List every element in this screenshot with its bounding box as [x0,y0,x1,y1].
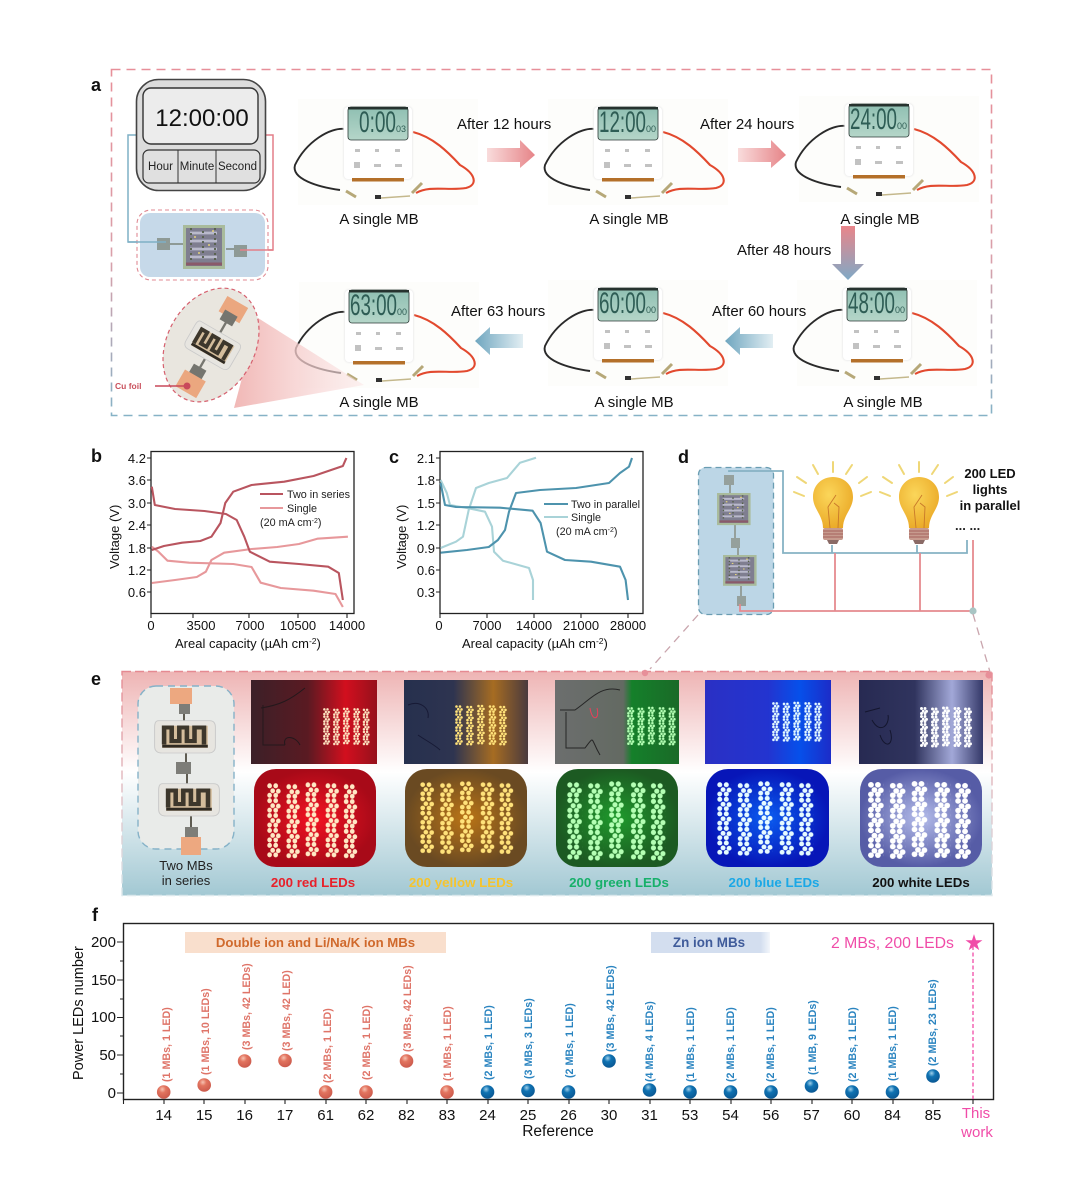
single micro-battery photo with wires [128,210,273,280]
y-axis numbers: 1.2 [128,563,146,578]
legend: ) [614,526,617,538]
x-axis reference numbers: 60 [844,1107,860,1124]
rotated labels: Zn ion group: (4 MBs, 4 LEDs) [644,1001,656,1082]
rotated labels: Zn ion group: (3 MBs, 3 LEDs) [523,998,535,1079]
caption: two MBs in series: Two MBs [159,858,213,873]
y-axis numbers: 3.6 [128,473,146,488]
time step labels: After 24 hours [700,116,794,133]
rotated labels: Zn ion group: (2 MBs, 1 LED) [847,1007,859,1082]
note: 200 LED lights in parallel [960,466,1020,513]
x-axis numbers: 14000 [329,618,365,633]
LED colour captions [271,875,970,890]
captions: A single MB: A single MB [843,394,923,411]
rotated labels: Zn ion group: (1 MBs, 1 LED) [685,1007,697,1082]
timer photo 48 hours [794,280,977,386]
legend [260,489,351,529]
x-axis title: Reference [522,1123,594,1140]
legend: (20 mA cm [260,517,312,529]
LED colour captions: 200 red LEDs [271,875,355,890]
x-axis reference numbers: 84 [884,1107,901,1124]
blue LED photos [705,680,831,867]
curve: two in series discharge and charge [152,458,346,600]
x-axis reference numbers: 56 [763,1107,779,1124]
y-axis numbers: 1.8 [128,541,146,556]
timer photo 63 hours: 63:00 [350,289,397,322]
this work line and star: ★ [964,930,984,955]
axis titles [107,505,321,651]
timer photo 24 hours [796,96,979,202]
rotated labels: Zn ion group: (1 MBs, 1 LED) [887,1006,899,1081]
x-axis numbers: 28000 [610,618,646,633]
x-axis numbers: 0 [435,618,443,633]
x-axis numbers: 0 [147,618,155,633]
legend: Two in series [287,489,351,501]
chart frame and ticks [117,924,994,1104]
legend [544,499,640,538]
panel label a: a [91,75,102,95]
curve: single discharge and charge [152,537,348,607]
axis titles [394,505,608,651]
panel label b: b [91,446,102,466]
note: 200 LED lights in parallel: in parallel [960,498,1020,513]
rotated labels: double ion group: (2 MBs, 1 LED) [361,1005,373,1080]
arrow: 63 hours left [475,327,523,355]
panel e: LED demonstration [91,669,993,896]
time step labels [451,116,831,320]
x-axis reference numbers: 15 [196,1107,213,1124]
rotated labels: double ion group [161,963,454,1083]
caption: two MBs in series: in series [162,873,211,888]
LED colour captions: 200 green LEDs [569,875,669,890]
x label: This work: This [962,1105,990,1122]
y-axis numbers: 1.8 [417,473,435,488]
rotated labels: Zn ion group: (2 MBs, 23 LEDs) [927,979,939,1066]
x-axis numbers: 10500 [280,618,316,633]
timer schematic: Hour [148,161,173,173]
zoom connector lines [650,614,990,672]
timer photo 12 hours: 12:00 [599,106,646,139]
y-axis numbers: 0.9 [417,541,435,556]
arrow: 24 hours [738,140,786,168]
rotated labels: double ion group: (1 MBs, 1 LED) [161,1007,173,1082]
x-axis reference numbers: 61 [317,1107,334,1124]
x-axis reference numbers: 82 [398,1107,415,1124]
legend: Single [571,512,601,524]
panel c: voltage chart parallel [389,447,646,651]
curve: single [441,458,536,600]
legend: ) [318,517,321,529]
x label: This work: work [960,1124,993,1141]
axis titles: Areal capacity (µAh cm [175,636,309,651]
rotated labels: Zn ion group: (1 MB, 9 LEDs) [807,1000,819,1075]
rotated labels: double ion group: (1 MBs, 10 LEDs) [200,988,212,1075]
timer schematic: Minute [180,161,214,173]
x-axis numbers [435,618,646,633]
panel a: long-duration timer demonstration [91,70,992,419]
timer photo 24 hours: 00 [897,121,907,131]
axis titles: Voltage (V) [107,505,122,569]
connection wires [729,471,973,611]
x-axis numbers: 7000 [473,618,501,633]
x-axis reference numbers: 26 [560,1107,577,1124]
rotated labels: Zn ion group: (2 MBs, 1 LED) [564,1003,576,1078]
axis titles: Voltage (V) [394,505,409,569]
legend: Two in parallel [571,499,640,511]
x-axis reference numbers: 14 [155,1107,172,1124]
y-axis numbers: 150 [91,972,116,989]
chart frame and ticks [436,452,643,618]
y-axis numbers: 0.3 [417,585,435,600]
x-axis reference numbers: 24 [479,1107,496,1124]
legend: Single [287,503,317,515]
photo: two MBs in series [138,686,234,855]
rotated labels: double ion group: (3 MBs, 42 LED) [281,970,293,1051]
data points: Zn ion [481,1054,940,1099]
note: 200 LED lights in parallel: lights [973,482,1007,497]
panel label f: f [92,905,99,925]
timer photo 12 hours [545,99,728,205]
x-axis numbers: 14000 [516,618,552,633]
captions: A single MB: A single MB [589,211,669,228]
y-axis numbers [128,451,146,600]
zoom cone from timer to cell [234,318,364,408]
band: double ion and Li/Na/K ion MBs: Double ion and Li/Na/K ion MBs [216,935,415,950]
x-axis reference numbers: 83 [439,1107,455,1124]
y-axis numbers: 200 [91,934,116,951]
x-axis numbers: 3500 [187,618,215,633]
zoomed cell with Cu foil: Cu foil [115,381,141,391]
x-axis reference numbers: 31 [641,1107,658,1124]
time step labels: After 48 hours [737,242,831,259]
axis titles: ) [604,636,608,651]
x-axis numbers: 21000 [563,618,599,633]
rotated labels: double ion group: (1 MBs, 1 LED) [442,1006,454,1081]
panel f: LED count comparison chart [71,905,994,1141]
rotated labels: Zn ion group: (2 MBs, 1 LED) [725,1007,737,1082]
timer photo 48 hours: 48:00 [848,287,895,320]
note: 200 LED lights in parallel: 200 LED [964,466,1016,481]
data points: double ion and Li/Na/K [157,1054,454,1099]
time step labels: After 12 hours [457,116,551,133]
x-axis reference numbers: 25 [520,1107,536,1124]
axis titles: ) [316,636,321,651]
x-axis numbers: 7000 [236,618,264,633]
bulb 2 [880,462,957,544]
y-axis numbers: 2.1 [417,451,435,466]
panel b: voltage chart series [91,446,365,651]
x-axis reference numbers: 16 [236,1107,253,1124]
LED colour captions: 200 yellow LEDs [409,875,513,890]
caption: two MBs in series [159,858,213,888]
rotated labels: double ion group: (2 MBs, 1 LED) [322,1008,334,1083]
timer photo 0 hours: 0:00 [359,106,396,139]
x label: This work [960,1105,993,1141]
rotated labels: Zn ion group: (3 MBs, 42 LEDs) [605,965,617,1052]
y-axis numbers: 2.4 [128,518,146,533]
time step labels: After 60 hours [712,303,806,320]
green LED photos [555,680,679,867]
timer photo 0 hours: 03 [396,124,406,134]
panel label d: d [678,447,689,467]
timer photo 60 hours: 60:00 [599,287,646,320]
LED colour captions: 200 blue LEDs [729,875,819,890]
chart frame and ticks [147,452,354,618]
timer schematic [128,80,273,250]
x-axis numbers [147,618,365,633]
y-axis numbers: 100 [91,1009,116,1026]
yellow LED photos [404,680,528,867]
rotated labels: Zn ion group: (2 MBs, 1 LED) [483,1005,495,1080]
zoomed cell with Cu foil [115,271,278,419]
legend: -2 [608,527,614,534]
timer photo 60 hours: 00 [646,305,656,315]
rotated labels: double ion group: (3 MBs, 42 LEDs) [241,963,253,1050]
band: Zn ion MBs: Zn ion MBs [673,935,745,950]
timer photo 63 hours: 00 [397,307,407,317]
panel label e: e [91,669,101,689]
timer photo 48 hours: 00 [895,305,905,315]
series MB photo [698,468,774,614]
captions: A single MB [339,211,923,411]
captions: A single MB: A single MB [339,394,419,411]
x-axis reference numbers: 30 [601,1107,617,1124]
rotated labels: Zn ion group: (2 MBs, 1 LED) [765,1007,777,1082]
timer photo 63 hours [296,282,479,388]
arrow: 60 hours left [725,327,773,355]
x-axis reference numbers: 53 [682,1107,698,1124]
x-axis reference numbers [155,1107,941,1124]
captions: A single MB: A single MB [594,394,674,411]
LED colour captions: 200 white LEDs [872,875,970,890]
band: double ion and Li/Na/K ion MBs [185,932,446,953]
y-axis numbers: 4.2 [128,451,146,466]
captions: A single MB: A single MB [339,211,419,228]
white LED photos [859,680,983,867]
rotated labels: double ion group: (3 MBs, 42 LEDs) [402,965,414,1052]
y-axis numbers [417,451,435,600]
axis titles: -2 [596,636,604,646]
time step labels: After 63 hours [451,303,545,320]
this work label: 2 MBs, 200 LEDs: 2 MBs, 200 LEDs [831,935,954,952]
arrow: 12 hours [487,140,535,168]
panel label c: c [389,447,399,467]
y-axis numbers: 0.6 [128,585,146,600]
ellipsis: ... ... [955,518,980,533]
timer photo 12 hours: 00 [646,124,656,134]
axis titles: -2 [309,636,317,646]
curve: two in parallel [441,458,632,600]
legend: -2 [312,518,318,525]
legend: (20 mA cm [556,526,608,538]
y-axis title: Power LEDs number [71,946,87,1080]
y-axis numbers: 0 [108,1085,116,1102]
y-axis numbers: 0.6 [417,563,435,578]
rotated labels: Zn ion group [483,965,939,1082]
timer schematic: Second [218,161,257,173]
timer photo 60 hours [545,280,728,386]
bulb 1 [794,462,871,544]
timer photo 0 hours [295,99,478,205]
x-axis reference numbers: 85 [925,1107,941,1124]
axis titles: Areal capacity (µAh cm [462,636,596,651]
x-axis reference numbers: 54 [722,1107,739,1124]
timer schematic: 12:00:00 [155,105,249,132]
panel d: circuit with two MBs and LED bulbs [678,447,1020,615]
red LED photos [251,680,377,867]
y-axis numbers [91,934,116,1102]
y-axis numbers: 3.0 [128,496,146,511]
y-axis numbers: 50 [99,1047,116,1064]
y-axis numbers: 1.2 [417,518,435,533]
timer photo 24 hours: 24:00 [850,103,897,136]
x-axis reference numbers: 57 [803,1107,820,1124]
arrow: 48 hours down [832,226,864,280]
node dot [969,607,977,615]
band: Zn ion MBs [651,932,770,953]
x-axis reference numbers: 62 [358,1107,374,1124]
captions: A single MB: A single MB [840,211,920,228]
x-axis reference numbers: 17 [277,1107,293,1124]
y-axis numbers: 1.5 [417,496,435,511]
